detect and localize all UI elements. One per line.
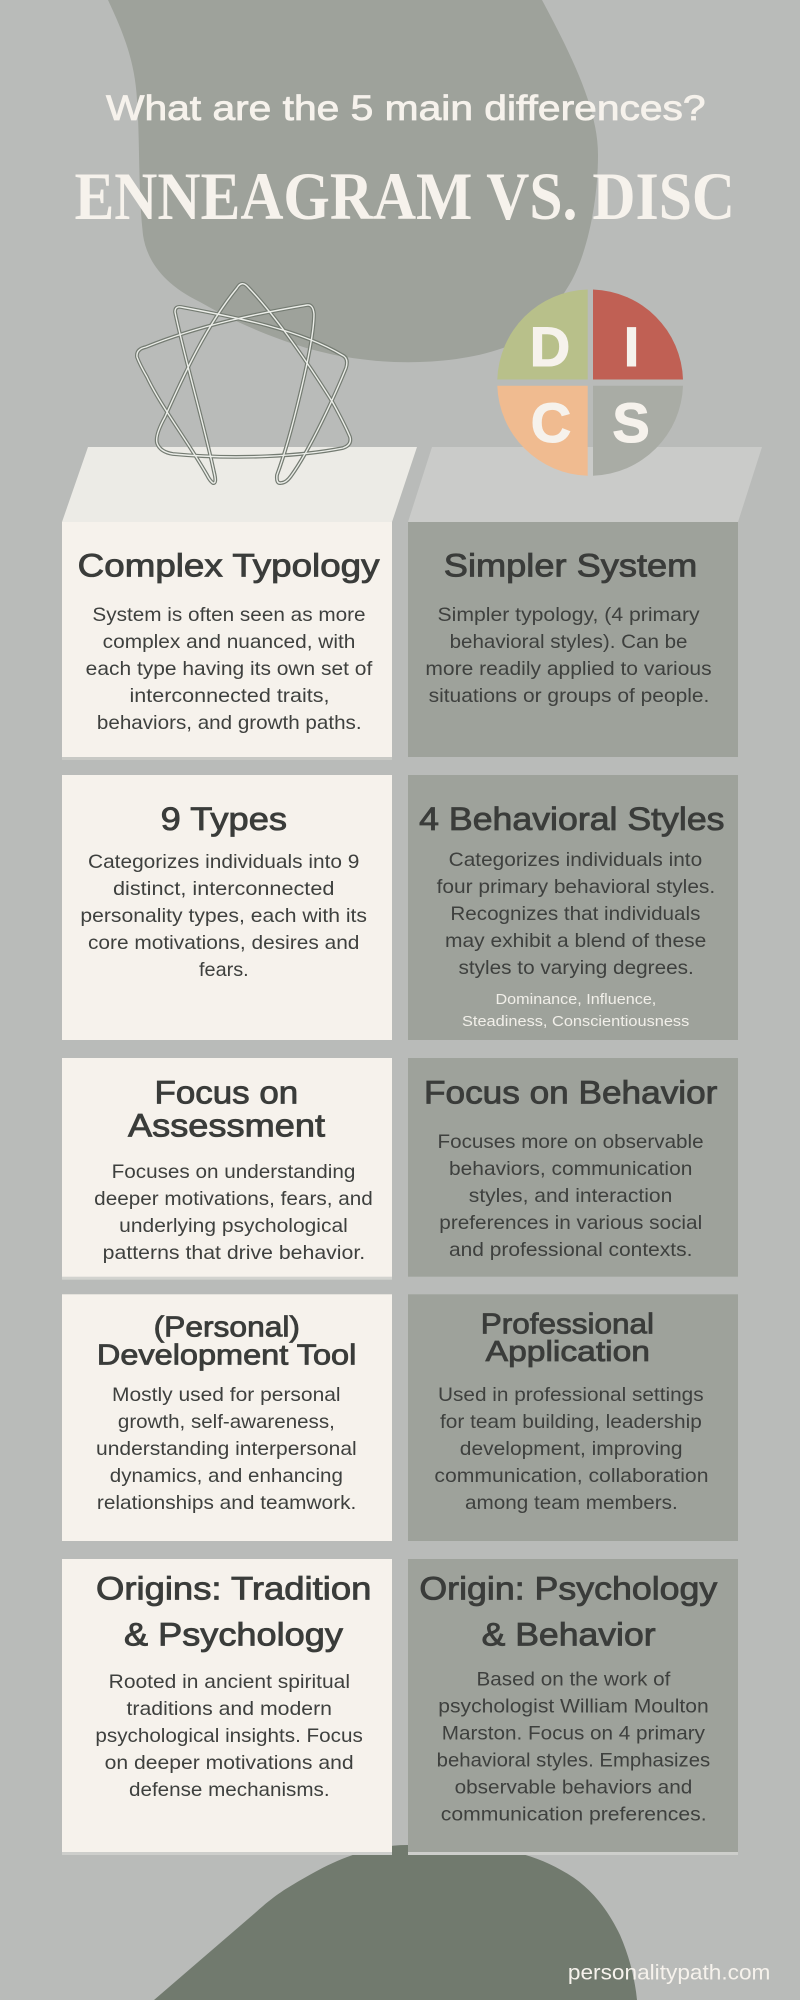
heading: Focus on — [154, 1074, 298, 1110]
body text: styles to varying degrees. — [458, 957, 694, 979]
body text: situations or groups of people. — [429, 685, 709, 707]
body text: behavioral styles). Can be — [450, 631, 688, 653]
heading: & Behavior — [482, 1616, 656, 1652]
heading: Focus on Behavior — [424, 1074, 718, 1110]
heading: Assessment — [128, 1108, 325, 1144]
body text: personality types, each with its — [80, 905, 367, 927]
body text: underlying psychological — [119, 1215, 348, 1237]
body text — [80, 851, 367, 981]
footer: website: personalitypath.com — [568, 1961, 770, 1984]
panel: Focus on Behavior — [408, 1058, 738, 1277]
heading: Professional — [481, 1308, 654, 1340]
body text: among team members. — [465, 1492, 678, 1514]
quadrant I — [593, 290, 683, 380]
panel: Complex Typology — [62, 522, 392, 760]
heading — [96, 1570, 371, 1652]
quadrant C — [497, 386, 588, 476]
subtitle: What are the 5 main differences? — [106, 89, 706, 128]
heading: & Psychology — [124, 1616, 343, 1652]
body text — [434, 1384, 708, 1514]
body text — [425, 604, 712, 707]
body text: interconnected traits, — [130, 685, 330, 707]
quadrant D — [497, 290, 588, 380]
heading: Simpler System — [444, 548, 697, 584]
pedestal: right — [408, 447, 762, 522]
body text — [438, 1131, 704, 1261]
panel: Origins: Tradition & Psychology — [62, 1559, 392, 1855]
note: the four styles — [462, 992, 689, 1030]
panel: Focus on Assessment — [62, 1058, 392, 1280]
body text — [86, 604, 373, 734]
body text: may exhibit a blend of these — [445, 930, 706, 952]
body text — [96, 1384, 357, 1514]
body text: Used in professional settings — [438, 1384, 704, 1406]
heading — [419, 1570, 717, 1652]
body text: Marston. Focus on 4 primary — [442, 1723, 705, 1745]
body text: styles, and interaction — [469, 1185, 672, 1207]
panel: Professional Application — [408, 1294, 738, 1541]
body text: growth, self-awareness, — [118, 1411, 335, 1433]
body text: for team building, leadership — [440, 1411, 702, 1433]
panel: Origin: Psychology & Behavior — [408, 1559, 738, 1855]
title block — [74, 89, 735, 234]
body text: development, improving — [460, 1438, 683, 1460]
icon: enneagram wire symbol — [137, 284, 350, 483]
body text: Simpler typology, (4 primary — [438, 604, 700, 626]
body text: core motivations, desires and — [88, 932, 359, 954]
body text: on deeper motivations and — [105, 1752, 354, 1774]
heading — [128, 1074, 325, 1144]
note: the four styles: Steadiness, Conscientiousness — [462, 1014, 689, 1030]
body text: each type having its own set of — [86, 658, 373, 680]
body text: relationships and teamwork. — [97, 1492, 356, 1514]
body text: Categorizes individuals into — [449, 849, 702, 871]
body text — [437, 849, 715, 979]
body text: distinct, interconnected — [113, 878, 334, 900]
heading: Application — [486, 1336, 650, 1368]
body text: more readily applied to various — [425, 658, 712, 680]
body text: Recognizes that individuals — [450, 903, 701, 925]
heading — [481, 1308, 654, 1368]
body text: deeper motivations, fears, and — [94, 1188, 373, 1210]
body text: and professional contexts. — [449, 1239, 692, 1261]
body text: defense mechanisms. — [129, 1779, 330, 1801]
body text: Mostly used for personal — [112, 1384, 341, 1406]
heading: Origin: Psychology — [419, 1570, 717, 1606]
letter S: S — [612, 391, 650, 454]
panel: (Personal) Development Tool — [62, 1294, 392, 1541]
body text: Focuses on understanding — [112, 1161, 355, 1183]
heading: Origins: Tradition — [96, 1570, 371, 1606]
body text: psychologist William Moulton — [438, 1696, 709, 1718]
letter C: C — [531, 391, 571, 454]
background blob: bottom — [154, 1845, 637, 2000]
body text: dynamics, and enhancing — [110, 1465, 343, 1487]
body text: Focuses more on observable — [438, 1131, 704, 1153]
body text: psychological insights. Focus — [95, 1725, 363, 1747]
body text: patterns that drive behavior. — [103, 1242, 365, 1264]
body text: fears. — [199, 959, 249, 981]
body text: observable behaviors and — [455, 1777, 692, 1799]
body text: traditions and modern — [126, 1698, 332, 1720]
heading: 9 Types — [161, 801, 287, 837]
body text: communication, collaboration — [434, 1465, 708, 1487]
body text: communication preferences. — [441, 1804, 707, 1826]
heading: (Personal) — [154, 1312, 300, 1344]
body text: understanding interpersonal — [96, 1438, 357, 1460]
quadrant S — [593, 386, 683, 476]
heading: 4 Behavioral Styles — [419, 801, 724, 837]
note: the four styles: Dominance, Influence, — [496, 992, 656, 1008]
body text: System is often seen as more — [92, 604, 366, 626]
heading — [97, 1312, 356, 1371]
body text: behaviors, communication — [449, 1158, 692, 1180]
heading: Development Tool — [97, 1339, 356, 1371]
pedestal: left — [62, 447, 417, 522]
letter I: I — [624, 315, 639, 378]
panel: 4 Behavioral Styles — [408, 775, 738, 1040]
icon: DISC quadrant circle — [497, 290, 683, 476]
panel: 9 Types — [62, 775, 392, 1040]
panel: Simpler System — [408, 522, 738, 757]
body text: Categorizes individuals into 9 — [88, 851, 359, 873]
body text: behaviors, and growth paths. — [97, 712, 362, 734]
body text — [437, 1669, 710, 1826]
letter D: D — [530, 315, 570, 378]
body text: behavioral styles. Emphasizes — [437, 1750, 710, 1772]
body text: preferences in various social — [439, 1212, 702, 1234]
body text — [94, 1161, 373, 1264]
heading: Complex Typology — [78, 548, 379, 584]
body text: four primary behavioral styles. — [437, 876, 715, 898]
body text: Rooted in ancient spiritual — [109, 1671, 350, 1693]
body text: complex and nuanced, with — [103, 631, 355, 653]
body text — [95, 1671, 363, 1801]
background blob: top — [108, 0, 598, 362]
body text: Based on the work of — [476, 1669, 671, 1691]
